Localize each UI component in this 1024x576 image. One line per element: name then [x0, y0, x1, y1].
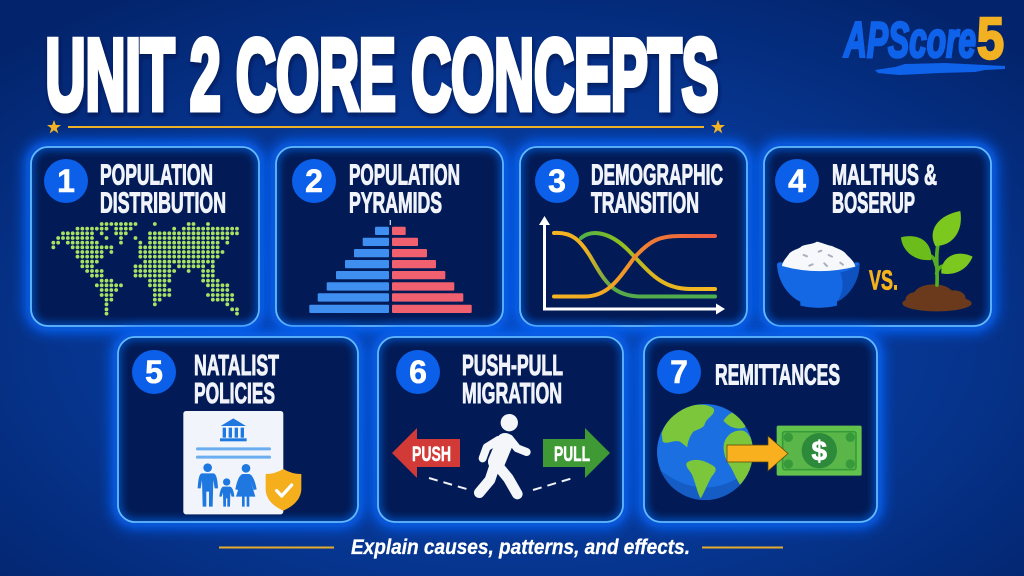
arrow: push: [392, 428, 460, 478]
number badge 3: [535, 159, 579, 203]
title underline with stars: [47, 120, 725, 134]
panel 1: population distribution: [31, 147, 259, 326]
heading 3: TRANSITION: [591, 188, 699, 220]
number badge 4: [775, 159, 819, 203]
number badge 5: [132, 350, 176, 394]
number badge 3: 3: [548, 163, 566, 199]
panel 5: natalist policies: [118, 337, 358, 522]
number badge 1: 1: [57, 163, 75, 199]
heading 2: POPULATION: [349, 160, 460, 192]
footer tagline: Explain causes, patterns, and effects.: [351, 535, 690, 559]
logo: APScore5: 5: [977, 6, 1004, 72]
arrow: push: PUSH: [412, 443, 451, 466]
icon: policy document with family and shield: [183, 411, 301, 514]
heading 4: MALTHUS &: [832, 160, 937, 192]
panel 3: demographic transition: [520, 147, 747, 326]
panel 4: Malthus and Boserup: [764, 147, 991, 326]
heading 7: REMITTANCES: [715, 360, 840, 392]
icon: rice bowl: [777, 242, 860, 308]
heading 5: [194, 350, 279, 410]
heading 4: [832, 160, 937, 220]
arrow: money transfer: [727, 436, 788, 471]
population pyramid chart: [309, 220, 472, 313]
arrow: pull: [543, 428, 610, 478]
icon: sprouting plant: [901, 211, 973, 311]
heading 5: NATALIST: [194, 350, 279, 382]
heading 1: [100, 160, 226, 220]
number badge 5: 5: [145, 354, 163, 390]
heading 6: MIGRATION: [462, 378, 562, 410]
heading 3: [591, 160, 723, 220]
heading 6: [462, 350, 563, 410]
number badge 6: [396, 350, 440, 394]
number badge 4: 4: [788, 163, 806, 199]
arrow: pull: PULL: [554, 443, 590, 466]
heading 6: PUSH-PULL: [462, 350, 563, 382]
panel 7: remittances: [644, 337, 877, 522]
heading 1: POPULATION: [100, 160, 213, 192]
panel 6: push-pull migration: [378, 337, 623, 522]
icon: walking person: [479, 414, 527, 494]
heading 4: BOSERUP: [832, 188, 915, 220]
number badge 6: 6: [409, 354, 427, 390]
dashed ground paths: [429, 478, 573, 490]
number badge 7: 7: [670, 354, 688, 390]
heading 1: DISTRIBUTION: [100, 188, 226, 220]
number badge 2: 2: [305, 163, 323, 199]
number badge 1: [44, 159, 88, 203]
icon: dollar bill: [777, 426, 862, 476]
number badge 7: [657, 350, 701, 394]
heading 5: POLICIES: [194, 378, 275, 410]
heading 3: DEMOGRAPHIC: [591, 160, 723, 192]
dotted world map: [53, 224, 237, 314]
heading 2: PYRAMIDS: [349, 188, 442, 220]
demographic transition chart: [539, 216, 725, 314]
heading 2: [349, 160, 460, 220]
icon: globe: [657, 404, 755, 501]
vs label: VS.: [869, 264, 898, 296]
number badge 2: [292, 159, 336, 203]
icon: dollar bill: $: [812, 436, 828, 467]
panel 2: population pyramids: [276, 147, 503, 326]
